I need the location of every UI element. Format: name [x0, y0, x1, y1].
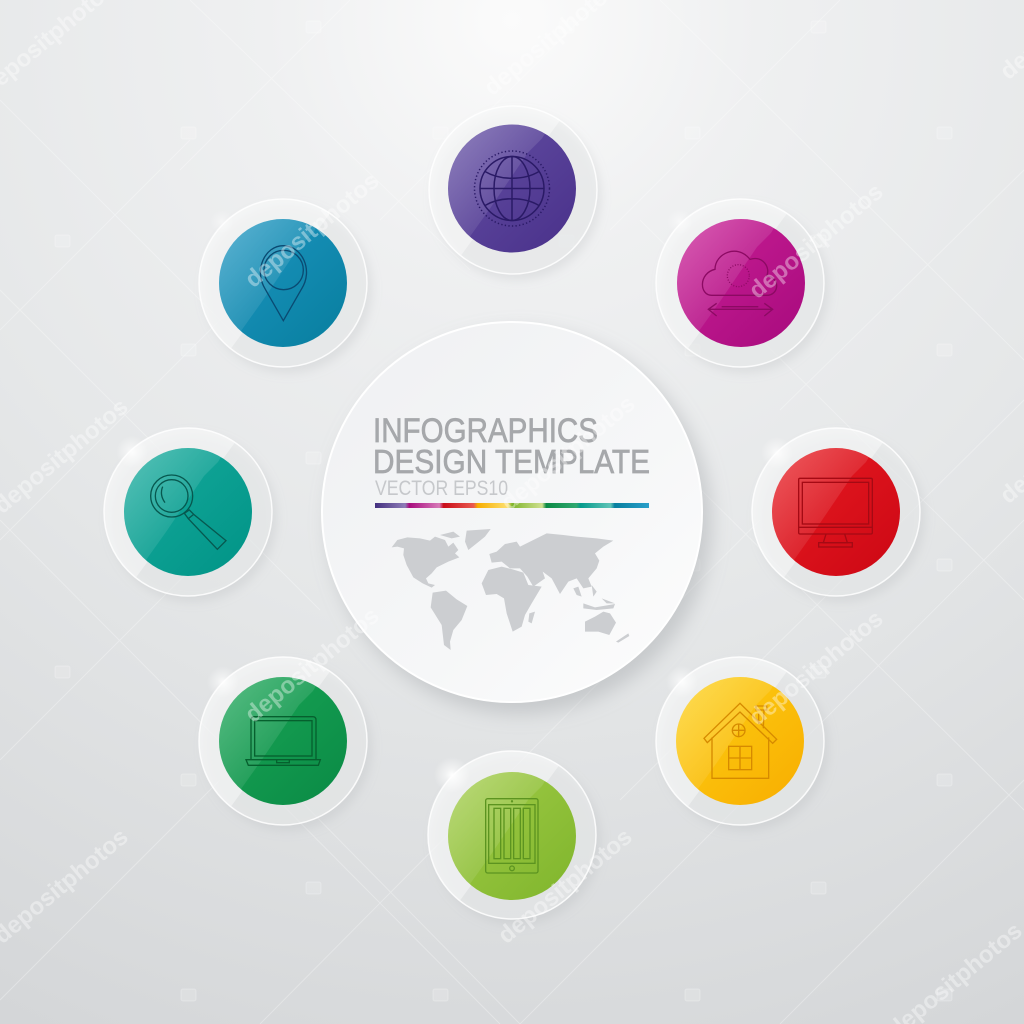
icon: globe — [474, 151, 550, 226]
button: globe — [428, 116, 601, 280]
icon: house — [704, 703, 777, 778]
rainbow divider bar — [375, 503, 649, 508]
button: monitor — [746, 422, 925, 602]
icon: map pin — [260, 246, 307, 321]
icon: tablet — [486, 799, 538, 873]
icon: cloud with arrows — [702, 251, 777, 316]
icon: monitor — [799, 478, 872, 547]
title: DESIGN TEMPLATE — [373, 443, 650, 480]
button: tablet — [422, 745, 601, 925]
title — [373, 412, 650, 500]
title: INFOGRAPHICS — [373, 412, 598, 450]
world map — [392, 529, 629, 650]
watermarks: depositphotos — [493, 823, 638, 949]
button: laptop — [193, 651, 372, 831]
icon: magnifier — [151, 475, 226, 549]
title: VECTOR EPS10 — [375, 477, 508, 500]
lens flares — [116, 209, 793, 793]
button: map pin — [193, 193, 372, 373]
watermarks: depositphotos — [240, 602, 385, 728]
button: cloud transfer — [650, 193, 829, 373]
watermarks: depositphotos — [496, 390, 641, 516]
icon: laptop — [246, 717, 320, 765]
watermarks: depositphotos — [744, 178, 889, 304]
button: magnifier — [98, 422, 277, 602]
watermarks: depositphotos — [744, 605, 889, 731]
button: house — [650, 651, 829, 831]
watermarks: depositphotos — [240, 167, 385, 293]
panel: central plate — [322, 322, 712, 714]
